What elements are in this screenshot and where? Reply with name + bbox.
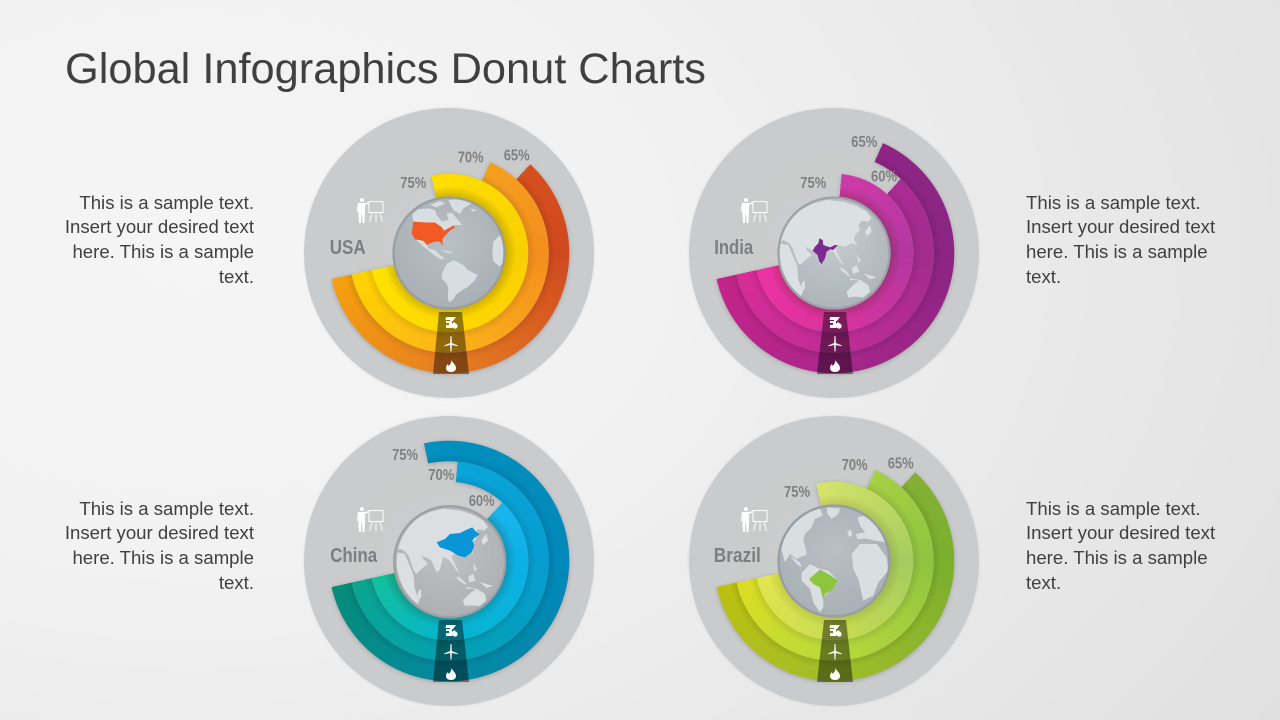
text block: Brazil: here. This is a sample: [1026, 547, 1208, 568]
background disk: [304, 108, 594, 398]
globe: Asia with China highlighted: [393, 505, 506, 618]
icon: presenter and board: [741, 198, 767, 223]
icon: factory: [446, 625, 458, 637]
overlay: labels and icons: [714, 456, 914, 682]
ring: 75%: [756, 174, 914, 332]
text block: USA: here. This is a sample: [72, 241, 254, 262]
panel: China donut chart: [304, 416, 594, 706]
icon: presenter and board: [741, 507, 767, 532]
text block: China: This is a sample text.: [79, 498, 254, 518]
text block: India: Insert your desired text: [1026, 216, 1215, 237]
text block: Brazil: Insert your desired text: [1026, 522, 1215, 543]
ring: 60%: [736, 179, 934, 353]
icon: presenter and board: [357, 198, 383, 223]
label: 60%: 60%: [469, 493, 495, 510]
icon: wind turbine: [828, 644, 842, 660]
ring: 65%: [716, 472, 956, 684]
text block: USA: This is a sample text.: [79, 192, 254, 212]
text block: Brazil: text.: [1026, 572, 1061, 593]
ring: 70%: [352, 462, 549, 661]
icon: flame: [446, 668, 456, 680]
text block: China: text.: [219, 572, 254, 593]
label: 65%: 65%: [504, 148, 530, 164]
band: dark sector: [433, 620, 469, 682]
globe: Americas with USA highlighted: [392, 196, 506, 310]
label: 60%: 60%: [871, 168, 897, 186]
label: Brazil: Brazil: [714, 545, 761, 567]
overlay: labels and icons: [330, 148, 530, 374]
icon: factory: [446, 317, 458, 329]
icon: wind turbine: [444, 336, 458, 352]
text block: India: text.: [1026, 266, 1061, 287]
map: India: [813, 238, 838, 264]
band: dark sector: [817, 620, 853, 682]
donut rings: China: [330, 440, 571, 684]
text block: USA: [65, 192, 254, 287]
label: 75%: 75%: [392, 447, 418, 464]
icon: presenter and board: [357, 507, 383, 532]
text block: Brazil: This is a sample text.: [1026, 498, 1201, 518]
map: China: [437, 527, 480, 557]
ring: 75%: [330, 440, 571, 684]
label: 75%: 75%: [800, 175, 826, 192]
text block: Brazil: [1026, 498, 1216, 593]
icon: flame: [830, 668, 840, 680]
globe: Asia with India highlighted: [777, 196, 891, 310]
ring: 60%: [372, 502, 528, 640]
text block: India: This is a sample text.: [1026, 192, 1201, 212]
label: 75%: 75%: [400, 175, 426, 192]
label: China: China: [330, 545, 378, 567]
icon: factory: [830, 317, 842, 329]
ring: 70%: [736, 470, 934, 661]
label: USA: USA: [330, 237, 366, 259]
text block: China: here. This is a sample: [72, 547, 254, 568]
background disk: [689, 416, 979, 706]
ring: 70%: [352, 162, 549, 353]
icon: factory: [830, 625, 842, 637]
icon: flame: [446, 360, 456, 372]
ring: 75%: [372, 173, 528, 332]
donut rings: Brazil: [716, 470, 956, 684]
ring: 65%: [330, 164, 571, 376]
panel: India donut chart: [689, 108, 979, 398]
label: 70%: 70%: [428, 467, 454, 484]
text block: China: [65, 498, 254, 593]
label: 70%: 70%: [458, 150, 484, 166]
label: 75%: 75%: [784, 484, 810, 501]
background disk: [689, 108, 979, 398]
donut rings: India: [716, 143, 956, 376]
text block: India: [1026, 192, 1216, 287]
band: dark sector: [433, 312, 469, 374]
map: USA: [412, 222, 455, 246]
icon: wind turbine: [444, 644, 458, 660]
label: 65%: 65%: [888, 456, 914, 472]
text block: India: here. This is a sample: [1026, 241, 1208, 262]
panel: Brazil donut chart: [689, 416, 979, 706]
icon: flame: [830, 360, 840, 372]
ring: 75%: [756, 481, 914, 640]
background disk: [304, 416, 594, 706]
donut rings: USA: [330, 162, 571, 376]
band: dark sector: [817, 312, 853, 374]
icon: wind turbine: [828, 336, 842, 352]
panel: USA donut chart: [304, 108, 594, 398]
label: India: India: [714, 237, 754, 259]
text block: USA: text.: [219, 266, 254, 287]
ring: 65%: [716, 143, 956, 376]
globe: Atlantic with Brazil highlighted: [777, 504, 891, 618]
overlay: labels and icons: [714, 134, 897, 374]
label: 65%: 65%: [851, 134, 877, 151]
text block: USA: Insert your desired text: [65, 216, 254, 237]
label: 70%: 70%: [842, 457, 868, 474]
text block: China: Insert your desired text: [65, 522, 254, 543]
overlay: labels and icons: [330, 447, 495, 682]
title: Global Infographics Donut Charts: [65, 45, 706, 93]
map: Brazil: [809, 570, 837, 599]
